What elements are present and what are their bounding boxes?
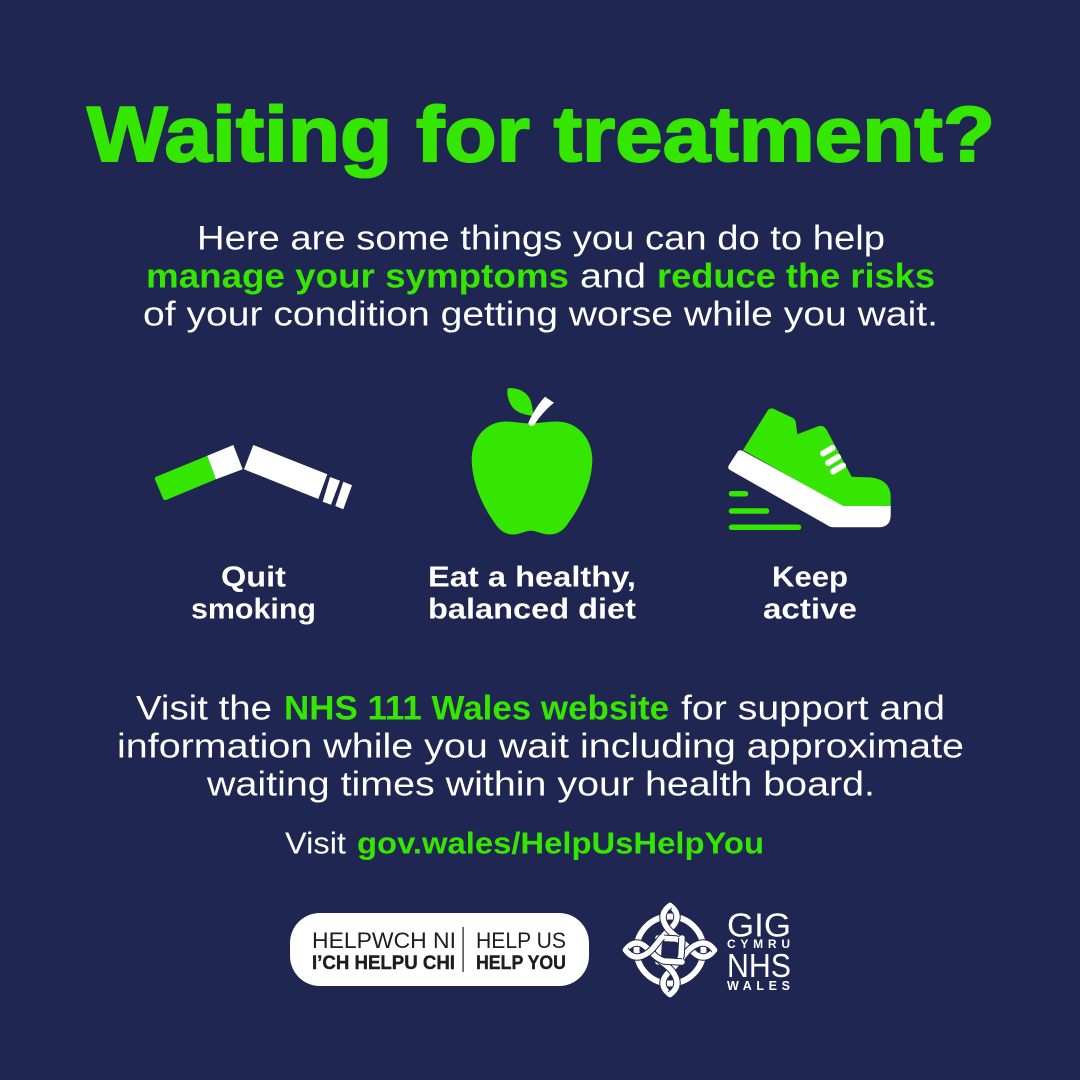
label: quit smoking: Quit — [221, 562, 286, 594]
label: keep active — [763, 562, 857, 626]
label: keep active: active — [763, 594, 857, 626]
logo: help us help you — [290, 913, 589, 986]
logo: GIG Cymru NHS Wales: CYMRU — [727, 937, 790, 951]
support text: information while you wait including approximate — [117, 728, 964, 766]
label: keep active: Keep — [772, 562, 848, 594]
support text: waiting times within your health board. — [206, 766, 875, 804]
logo: help us help you: HELP YOU — [476, 953, 566, 974]
support text: Visit the — [136, 690, 272, 728]
intro text — [143, 220, 938, 334]
icon: broken cigarette — [155, 445, 352, 509]
icon: apple — [472, 388, 592, 534]
label: healthy diet: balanced diet — [428, 594, 636, 626]
support text: for support and — [681, 690, 945, 728]
logo: GIG Cymru NHS Wales — [727, 906, 791, 993]
support text: NHS 111 Wales website — [284, 690, 669, 728]
intro text: Here are some things you can do to help — [197, 220, 885, 258]
website link: gov.wales/HelpUsHelpYou — [357, 826, 764, 860]
label: quit smoking: smoking — [191, 594, 316, 626]
label: healthy diet — [428, 562, 636, 626]
support text — [117, 690, 964, 804]
icon: running shoe — [728, 408, 891, 527]
logo: GIG Cymru NHS Wales: WALES — [727, 979, 790, 993]
intro text: reduce the risks — [657, 258, 935, 296]
logo: help us help you: HELPWCH NI — [312, 928, 456, 953]
title: Waiting for treatment? — [87, 90, 995, 178]
logo: GIG Cymru NHS Wales: GIG — [727, 906, 791, 944]
logo: GIG Cymru NHS Wales: NHS — [727, 947, 791, 984]
intro text: of your condition getting worse while you wait. — [143, 296, 938, 334]
logo: help us help you: HELP US — [476, 928, 566, 953]
label: quit smoking — [191, 562, 316, 626]
intro text: and — [580, 258, 646, 296]
logo: celtic knot — [626, 906, 714, 994]
website link: Visit — [285, 826, 347, 860]
logo: help us help you: I’CH HELPU CHI — [312, 953, 455, 974]
label: healthy diet: Eat a healthy, — [428, 562, 636, 594]
intro text: manage your symptoms — [146, 258, 569, 296]
